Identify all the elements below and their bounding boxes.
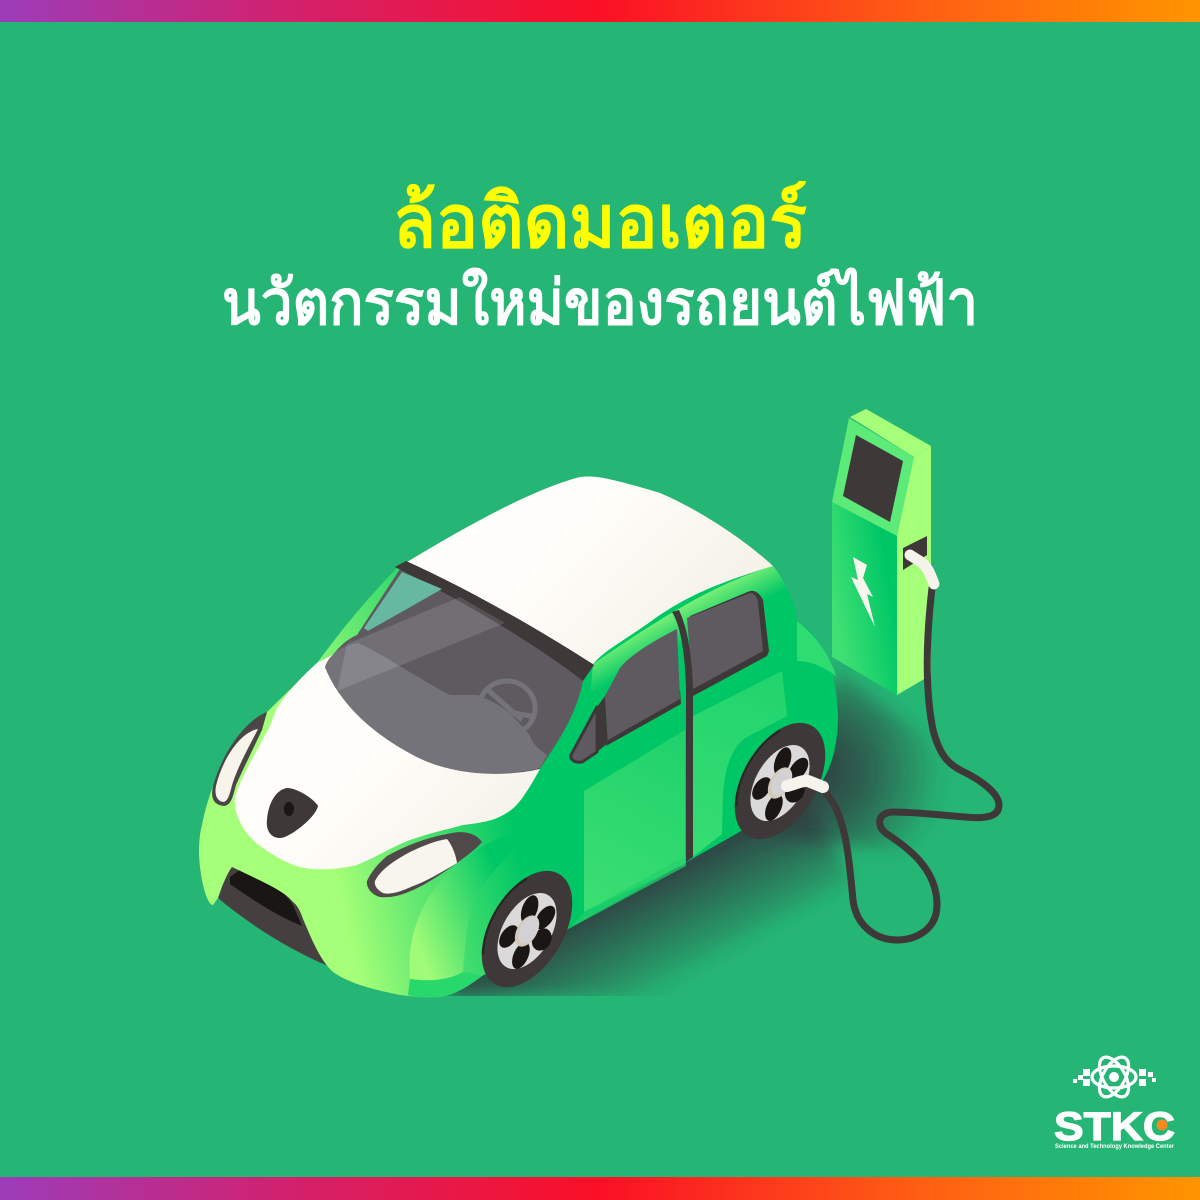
headlight lens xyxy=(375,839,457,894)
dashboard reflection xyxy=(325,643,547,774)
charger plug xyxy=(910,555,934,584)
front side window xyxy=(605,629,681,746)
door lower strip xyxy=(570,856,686,928)
STKC logo xyxy=(1054,1052,1175,1150)
front wheel xyxy=(482,851,572,1007)
front window frame xyxy=(606,690,681,746)
rim holes xyxy=(498,880,556,983)
tire xyxy=(735,703,825,859)
front emblem xyxy=(267,788,318,838)
atom icon xyxy=(1092,1052,1136,1102)
car shadow xyxy=(440,670,980,997)
front window pillar xyxy=(597,696,608,752)
charging cable xyxy=(826,588,999,940)
charger upper frame xyxy=(832,418,914,536)
icon: lightning bolt xyxy=(851,557,875,627)
charger socket xyxy=(903,536,927,570)
wheel plug xyxy=(787,781,823,787)
hub xyxy=(518,912,539,948)
tire inner edge xyxy=(482,877,527,955)
hub xyxy=(771,764,792,800)
charger front face xyxy=(832,502,897,695)
windshield side glass xyxy=(364,572,442,631)
logo tagline: Science and Technology Knowledge Center xyxy=(1055,1144,1175,1150)
title line 2: นวัตกรรมใหม่ของรถยนต์ไฟฟ้า xyxy=(222,267,978,338)
tire inner edge xyxy=(735,729,780,807)
steering wheel xyxy=(479,681,535,735)
title line 1: ล้อติดมอเตอร์ xyxy=(393,180,807,263)
rear side window xyxy=(687,591,769,696)
rear window frame xyxy=(690,591,769,696)
bumper xyxy=(218,866,328,966)
tire xyxy=(482,851,572,1007)
emblem center xyxy=(284,802,294,816)
rim holes xyxy=(751,732,809,835)
door pillar xyxy=(672,610,693,862)
logo squares xyxy=(1073,1069,1156,1086)
logo dot xyxy=(1156,1120,1168,1130)
lower front lip xyxy=(408,972,482,997)
rear fender xyxy=(797,621,836,676)
emblem shape xyxy=(267,788,318,838)
windshield glass xyxy=(325,561,594,774)
title xyxy=(222,180,978,338)
bottom gradient bar xyxy=(0,1177,1200,1200)
charging station xyxy=(832,409,931,695)
charger screen xyxy=(843,435,903,522)
left headlight xyxy=(212,712,267,806)
right headlight xyxy=(367,832,482,897)
top gradient bar xyxy=(0,0,1200,22)
headlight housing xyxy=(367,832,482,897)
car xyxy=(199,476,838,1007)
hood xyxy=(235,640,540,869)
front grille xyxy=(230,870,302,926)
roof xyxy=(407,476,773,664)
roof edge highlight xyxy=(590,566,797,740)
charger side face xyxy=(897,446,931,695)
charger top xyxy=(850,409,931,457)
rim xyxy=(497,880,557,982)
car body xyxy=(199,565,838,997)
rear window glass xyxy=(687,593,763,689)
rear door panel xyxy=(693,671,787,857)
rear wheel xyxy=(735,703,825,859)
headlight lens xyxy=(215,729,258,802)
rim xyxy=(750,732,810,834)
windshield top strip xyxy=(395,561,594,681)
front window glass xyxy=(605,629,680,740)
front fender xyxy=(410,830,540,980)
front door panel xyxy=(584,730,685,912)
headlight dark housing xyxy=(212,712,267,806)
logo wordmark: STKC xyxy=(1054,1105,1175,1149)
hub ring xyxy=(768,762,792,804)
sun reflection xyxy=(337,597,505,691)
front quarter window xyxy=(571,707,597,762)
hub ring xyxy=(515,910,539,952)
